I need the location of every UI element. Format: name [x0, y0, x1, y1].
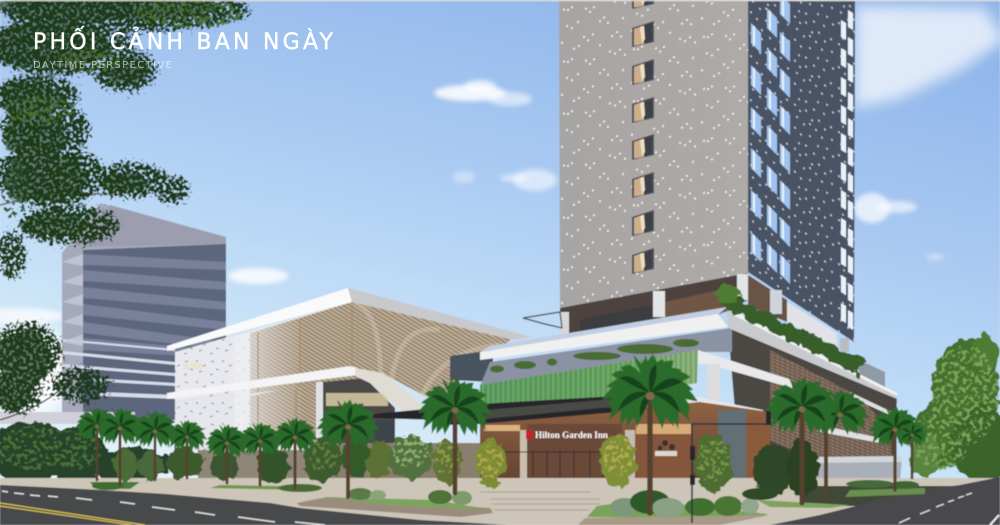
left road: [0, 485, 507, 525]
background office tower: [0, 203, 226, 424]
shrubs: [92, 480, 919, 518]
front window column: [632, 0, 654, 274]
right brick facade: [728, 327, 902, 488]
pavilion sign: Sa Ninh: [183, 361, 203, 371]
trunks: [97, 397, 912, 513]
left mid tree: [0, 322, 110, 420]
palm trees: [74, 347, 929, 513]
black entrance canopy: [373, 396, 617, 425]
title: PHỐI CẢNH BAN NGÀY: [33, 26, 334, 55]
crosswalk stripes: [480, 492, 600, 510]
frame edge: [0, 0, 1000, 2]
road dashes: [2, 491, 972, 525]
traffic light pole: [690, 411, 771, 523]
low background forest: [0, 422, 170, 483]
diagonal stair: [355, 368, 428, 414]
subtitle: DAYTIME PERSPECTIVE: [33, 60, 172, 71]
hotel emblem: [655, 440, 677, 456]
foreground tree top-left: branches: [0, 0, 140, 205]
main tower: front facade: [559, 0, 748, 308]
roof slab: [167, 288, 532, 351]
foreground tree top-left: foliage: [0, 0, 250, 279]
ground floor base: [198, 450, 323, 482]
clouds: [0, 5, 1000, 415]
upper right glazing: [450, 350, 493, 382]
right facade windows: [751, 0, 853, 330]
glass storey under tower: [523, 273, 748, 338]
roof plate with glass rail: [480, 307, 897, 399]
roof planting: [716, 285, 862, 368]
hanging green wall: [480, 350, 698, 406]
middle floor plates: [677, 350, 892, 443]
left pavilion building: [167, 288, 532, 488]
lobby glazing: [316, 378, 395, 447]
canopy floor plate: [167, 366, 358, 399]
right road: [770, 477, 1000, 525]
hotel podium: [373, 273, 902, 492]
second floor stone band: [480, 328, 732, 386]
distant right trees: [910, 335, 1000, 485]
set-back walls under tower: [748, 275, 885, 388]
Hilton Garden Inn sign: Hilton Garden Inn: [535, 431, 609, 441]
woven tan screen: [235, 302, 513, 448]
glass door grid: [480, 450, 625, 492]
landscape trees: [113, 434, 819, 497]
main tower: right facade: [748, 0, 855, 342]
lobby: [480, 402, 770, 492]
median islands: [90, 482, 925, 525]
terrace shrubs: [490, 339, 699, 372]
ground and sidewalks: [0, 477, 1000, 525]
yellow centre lines: [0, 503, 145, 525]
dotted white wall: [175, 302, 352, 455]
